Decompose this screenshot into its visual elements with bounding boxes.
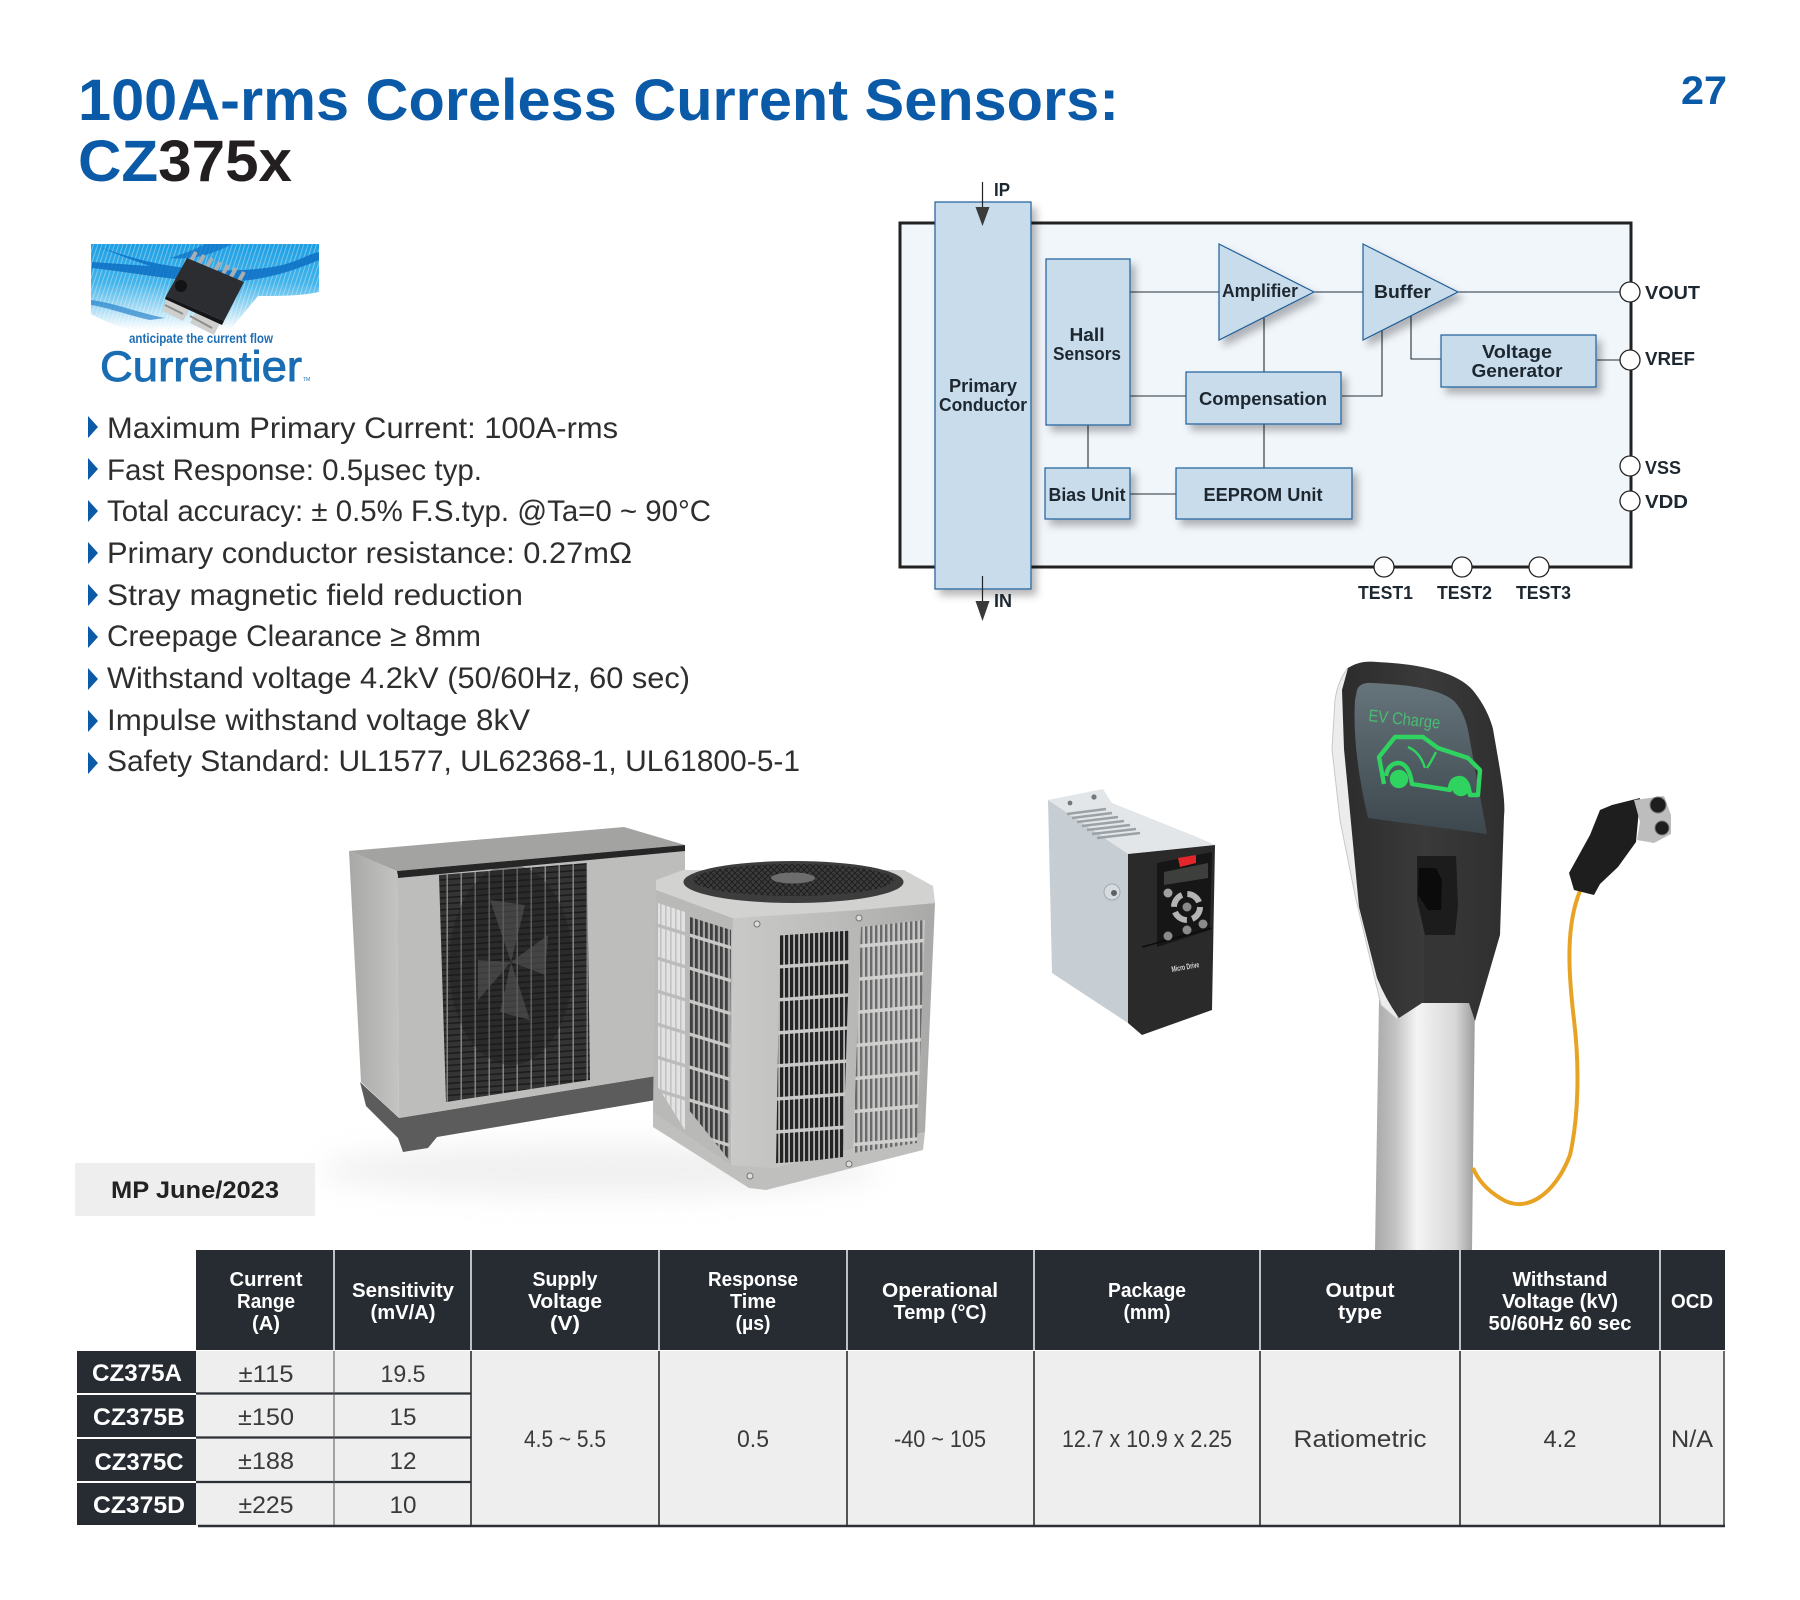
feature list: Withstand voltage 4.2kV (50/60Hz, 60 sec) [107,662,690,695]
screen [1355,683,1487,834]
charger head rim [1332,668,1398,1020]
table header: 50/60Hz 60 sec [1488,1313,1632,1335]
table values: 15 [390,1404,416,1431]
feature list: Primary conductor resistance: 0.27mΩ [107,537,632,570]
feature list: Safety Standard: UL1577, UL62368-1, UL61800-5-1 [107,745,800,778]
feature list: Total accuracy: ± 0.5% F.S.typ. @Ta=0 ~ 90°C [107,495,711,528]
table header: (mm) [1124,1302,1170,1324]
title: CZ375x [78,129,292,194]
specification table [77,1250,1725,1526]
table header: (A) [252,1313,280,1335]
table values: 19.5 [380,1361,426,1388]
hall sensors [1046,259,1130,425]
table header: Response [708,1269,798,1291]
socket [1417,856,1465,1003]
page number: 27 [1681,69,1727,113]
eeprom unit: EEPROM Unit [1204,485,1322,505]
table header: Withstand [1512,1269,1608,1291]
table header: Time [730,1291,776,1313]
table header: (V) [550,1313,580,1335]
rear heat pump [349,827,685,1152]
table header: Voltage (kV) [1502,1291,1618,1313]
test pins: TEST2 [1437,583,1492,603]
logo: Currentier: anticipate the current flow [129,330,273,346]
output pins: VREF [1645,349,1695,369]
current arrows IP and IN [976,180,1012,621]
table values: N/A [1671,1426,1713,1453]
table header: Range [237,1291,295,1313]
table header: type [1338,1302,1382,1324]
table body [196,1351,1725,1526]
table values: 0.5 [737,1426,769,1453]
table header: Voltage [528,1291,602,1313]
table header: (µs) [736,1313,770,1335]
block diagram [900,180,1700,621]
feature list [88,412,800,778]
buffer [1363,244,1458,340]
feature list: Creepage Clearance ≥ 8mm [107,620,481,653]
table values: ±150 [238,1404,294,1431]
table values: ±225 [238,1492,294,1519]
photo: variable frequency drive [1048,789,1215,1035]
table values: ±188 [238,1448,294,1475]
feature list: Fast Response: 0.5µsec typ. [107,454,482,487]
feature list: Maximum Primary Current: 100A-rms [107,412,618,445]
photo: heat pump units [320,827,935,1196]
table header: (mV/A) [370,1302,436,1324]
table header: Temp (°C) [894,1302,986,1324]
row labels: CZ375A [92,1360,182,1387]
voltage generator: Generator [1472,361,1562,381]
cable [1473,891,1580,1204]
table header: Current [230,1269,303,1291]
row labels: CZ375C [94,1449,184,1476]
output pins [1620,282,1700,512]
table header: Supply [532,1269,598,1291]
output pins: VOUT [1645,283,1700,303]
table values: ±115 [238,1361,294,1388]
compensation: Compensation [1199,389,1327,409]
test pins: TEST1 [1358,583,1413,603]
logo: Currentier: Currentier [100,343,302,391]
chip [163,252,244,335]
output pins: VSS [1645,458,1681,478]
test pins: TEST3 [1516,583,1571,603]
voltage generator: Voltage [1482,342,1552,362]
table header: Output [1326,1280,1395,1302]
amplifier: Amplifier [1222,281,1298,301]
logo: Currentier: TM [303,377,310,383]
chip outline [900,223,1631,567]
bias unit: Bias Unit [1048,485,1126,505]
table values: 4.5 ~ 5.5 [524,1426,606,1453]
logo: Currentier [91,244,319,391]
table header: Package [1108,1280,1186,1302]
row labels [77,1351,196,1525]
date stamp: MP June/2023 [111,1177,279,1204]
table values: 10 [390,1492,416,1519]
primary conductor: Conductor [939,395,1027,415]
table values: Ratiometric [1294,1426,1426,1453]
table values: -40 ~ 105 [894,1426,986,1453]
hall sensors: Hall [1070,325,1104,345]
bias unit [1045,468,1130,519]
table values: 12.7 x 10.9 x 2.25 [1062,1426,1232,1453]
car icon [1379,737,1480,795]
feature list: Stray magnetic field reduction [107,579,523,612]
signal lines [1088,292,1620,494]
buffer: Buffer [1374,282,1431,302]
primary conductor [935,202,1031,589]
EV Charge text: EV Charge [1368,706,1441,733]
row labels: CZ375D [93,1492,185,1519]
photo: EV charging station [1332,662,1671,1250]
title: 100A-rms Coreless Current Sensors: [78,68,1119,133]
table header: Operational [882,1280,998,1302]
table values [238,1361,1713,1519]
plug [1569,796,1671,895]
date stamp [75,1163,315,1216]
front condenser unit [653,861,935,1190]
current arrows IP and IN: IN [994,591,1012,611]
table values: 4.2 [1544,1426,1576,1453]
voltage generator [1441,335,1596,387]
table header: OCD [1671,1291,1713,1313]
table header [196,1250,1725,1350]
primary conductor: Primary [949,376,1017,396]
keypad [1164,888,1208,940]
hall sensors: Sensors [1053,344,1121,364]
charger head [1342,662,1504,1021]
table values: 12 [390,1448,416,1475]
compensation [1186,372,1341,424]
output pins: VDD [1645,492,1688,512]
photo: variable frequency drive: Micro Drive [1171,960,1200,974]
test pins [1358,557,1571,603]
table header: Sensitivity [352,1280,455,1302]
row labels: CZ375B [93,1404,185,1431]
amplifier [1219,244,1314,340]
pole [1375,1000,1475,1250]
feature list: Impulse withstand voltage 8kV [107,704,530,737]
title [78,68,1119,194]
current arrows IP and IN: IP [994,180,1010,200]
eeprom unit [1176,468,1352,519]
